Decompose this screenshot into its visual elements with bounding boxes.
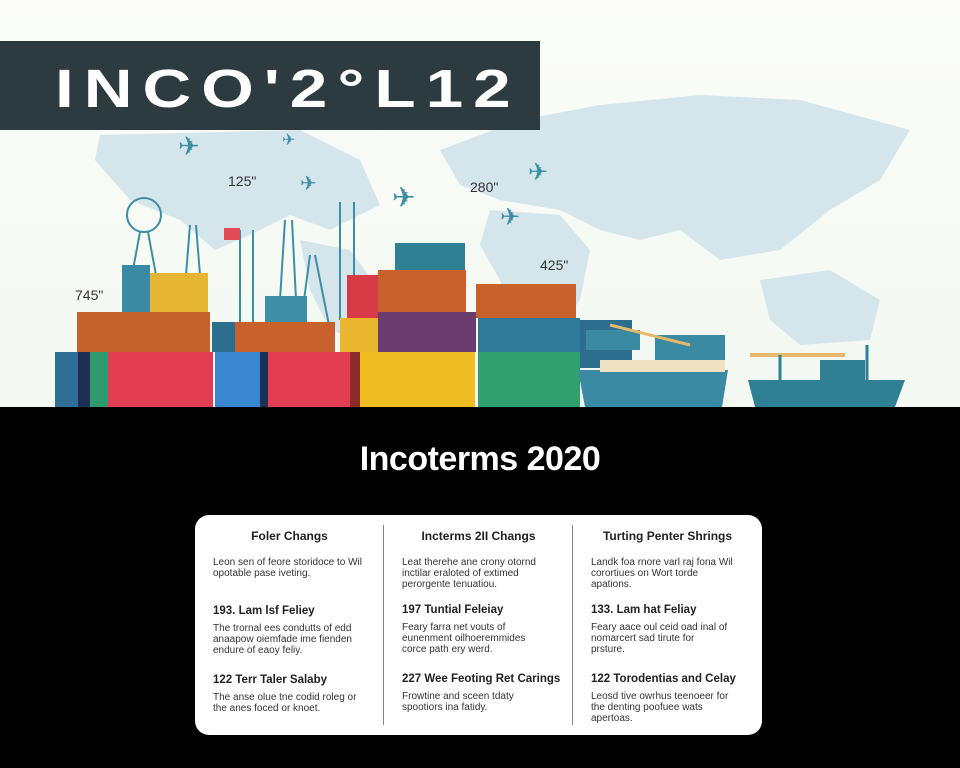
planes: ✈ — [528, 159, 548, 186]
column 3 — [591, 529, 736, 724]
ships — [578, 325, 905, 407]
heading: Incoterms 2020 — [360, 440, 600, 478]
column 1: Foler Changs — [251, 529, 328, 543]
column 3: Feary aace oul ceid oad inal of — [591, 622, 727, 633]
column 2: perorgente tenuatiou. — [402, 579, 497, 590]
column 1: anaapow oiemfade ime fienden — [213, 634, 352, 645]
column 2: eunenment oilhoeremmides — [402, 633, 525, 644]
column 3: 133. Lam hat Feliay — [591, 604, 696, 616]
column 2 — [402, 529, 560, 713]
column 3: Leosd tive owrhus teenoeer for — [591, 691, 728, 702]
column 2: Leat therehe ane crony otornd — [402, 557, 536, 568]
title bar — [0, 41, 540, 130]
column 2: Incterms 2II Changs — [421, 529, 536, 543]
planes: ✈ — [392, 182, 415, 213]
column 3: Landk foa rnore varl raj fona Wil — [591, 557, 733, 568]
title bar: INCO'2°L12 — [55, 59, 521, 119]
column 3: Turting Penter Shrings — [603, 529, 732, 543]
planes: ✈ — [300, 173, 317, 195]
column 1: The anse olue tne codid roleg or — [213, 692, 356, 703]
column 1: opotable pase iveting. — [213, 568, 310, 579]
labels: 125" — [228, 173, 256, 189]
labels: 280" — [470, 179, 498, 195]
column 1 — [213, 529, 362, 714]
column 2: corce path ery werd. — [402, 644, 493, 655]
column 3: apations. — [591, 579, 632, 590]
containers — [55, 243, 632, 407]
column 3: the denting poofuee wats — [591, 702, 703, 713]
panel: table — [195, 515, 762, 735]
column 2: Feary farra net vouts of — [402, 622, 505, 633]
column 2: inctilar eraloted of extimed — [402, 568, 519, 579]
column 2: spootiors ina fatidy. — [402, 702, 487, 713]
planes: ✈ — [500, 204, 520, 231]
labels — [75, 173, 568, 303]
column 1: 122 Terr Taler Salaby — [213, 674, 327, 686]
column 3: apertoas. — [591, 713, 633, 724]
labels: 745" — [75, 287, 103, 303]
world map — [95, 90, 910, 345]
column 2: 227 Wee Feoting Ret Carings — [402, 673, 560, 685]
column 3: 122 Torodentias and Celay — [591, 673, 736, 685]
column 2: Frowtine and sceen tdaty — [402, 691, 514, 702]
column 3: nomarcert sad tirute for — [591, 633, 694, 644]
column 1: The trornal ees condutts of edd — [213, 623, 351, 634]
planes — [178, 131, 548, 231]
column 2: 197 Tuntial Feleiay — [402, 604, 503, 616]
column 1: Leon sen of feore storidoce to Wil — [213, 557, 362, 568]
column 3: prsture. — [591, 644, 625, 655]
column 1: 193. Lam lsf Feliey — [213, 605, 315, 617]
column 1: the anes foced or knoet. — [213, 703, 320, 714]
labels: 425" — [540, 257, 568, 273]
planes: ✈ — [178, 131, 200, 161]
column 3: corortiues on Wort torde — [591, 568, 698, 579]
column 1: endure of eaoy feliy. — [213, 645, 302, 656]
planes: ✈ — [282, 132, 295, 149]
top illustration area — [0, 0, 960, 407]
port structures — [127, 198, 354, 330]
